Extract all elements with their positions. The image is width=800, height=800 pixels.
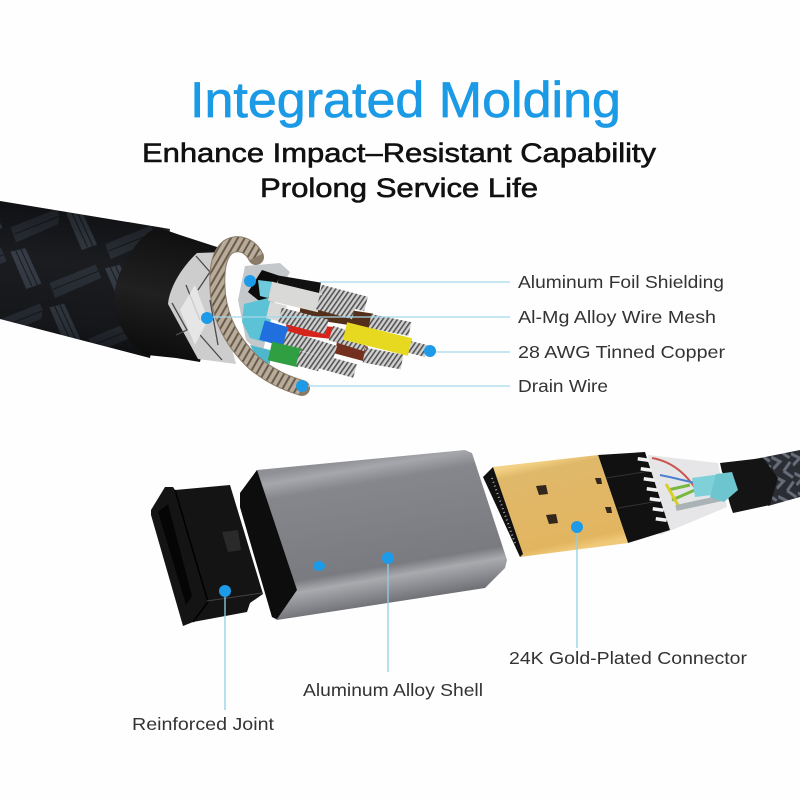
gold plate bbox=[493, 455, 628, 557]
illustration: gold-plated connector bbox=[483, 450, 800, 557]
illustration: reinforced joint bbox=[151, 485, 263, 626]
leader lines: cable labels bbox=[207, 282, 510, 386]
black sleeve bbox=[115, 227, 224, 362]
connector labels: 24K Gold-Plated Connector bbox=[509, 648, 747, 668]
wire: yellow bbox=[345, 331, 426, 351]
subtitle: Prolong Service Life bbox=[260, 173, 538, 203]
wire: red bbox=[286, 328, 366, 344]
wires fan-out bbox=[648, 455, 727, 535]
leader lines: connector labels bbox=[225, 527, 577, 710]
wire: blue bbox=[262, 330, 335, 353]
marker dots: connector bbox=[219, 521, 583, 597]
cable labels: Drain Wire bbox=[518, 376, 608, 396]
wire: brown bbox=[300, 310, 410, 329]
cable labels: Al-Mg Alloy Wire Mesh bbox=[518, 307, 716, 327]
wire: white upper bbox=[270, 291, 354, 312]
cyan inner shield bbox=[242, 298, 274, 342]
title: Integrated Molding bbox=[190, 72, 621, 128]
connector labels: Reinforced Joint bbox=[132, 714, 274, 734]
connector labels bbox=[132, 648, 747, 734]
marker dots: cable bbox=[201, 275, 436, 392]
drain wire bbox=[217, 244, 302, 388]
foil shielding bbox=[168, 252, 236, 364]
illustration: aluminum alloy shell bbox=[240, 450, 507, 620]
connector teeth bbox=[638, 457, 667, 522]
subtitle: Enhance Impact–Resistant Capability bbox=[142, 138, 657, 168]
gold holes bbox=[536, 478, 612, 524]
subtitle bbox=[142, 138, 657, 203]
illustration: cable cross-section bbox=[0, 201, 426, 388]
black housing bbox=[598, 452, 670, 543]
wire: green bbox=[270, 351, 355, 371]
cable labels: 28 AWG Tinned Copper bbox=[518, 342, 725, 362]
braided cable jacket bbox=[0, 201, 170, 358]
cable labels bbox=[518, 272, 725, 396]
inner foil collar bbox=[238, 263, 290, 355]
connector labels: Aluminum Alloy Shell bbox=[303, 680, 483, 700]
wire: dark red bbox=[336, 346, 402, 362]
cable labels: Aluminum Foil Shielding bbox=[518, 272, 724, 292]
black front bbox=[483, 467, 523, 557]
shell opening bbox=[240, 470, 297, 619]
wire: black bbox=[278, 281, 366, 304]
wire: white lower bbox=[268, 310, 327, 327]
cable tail bbox=[755, 450, 800, 506]
